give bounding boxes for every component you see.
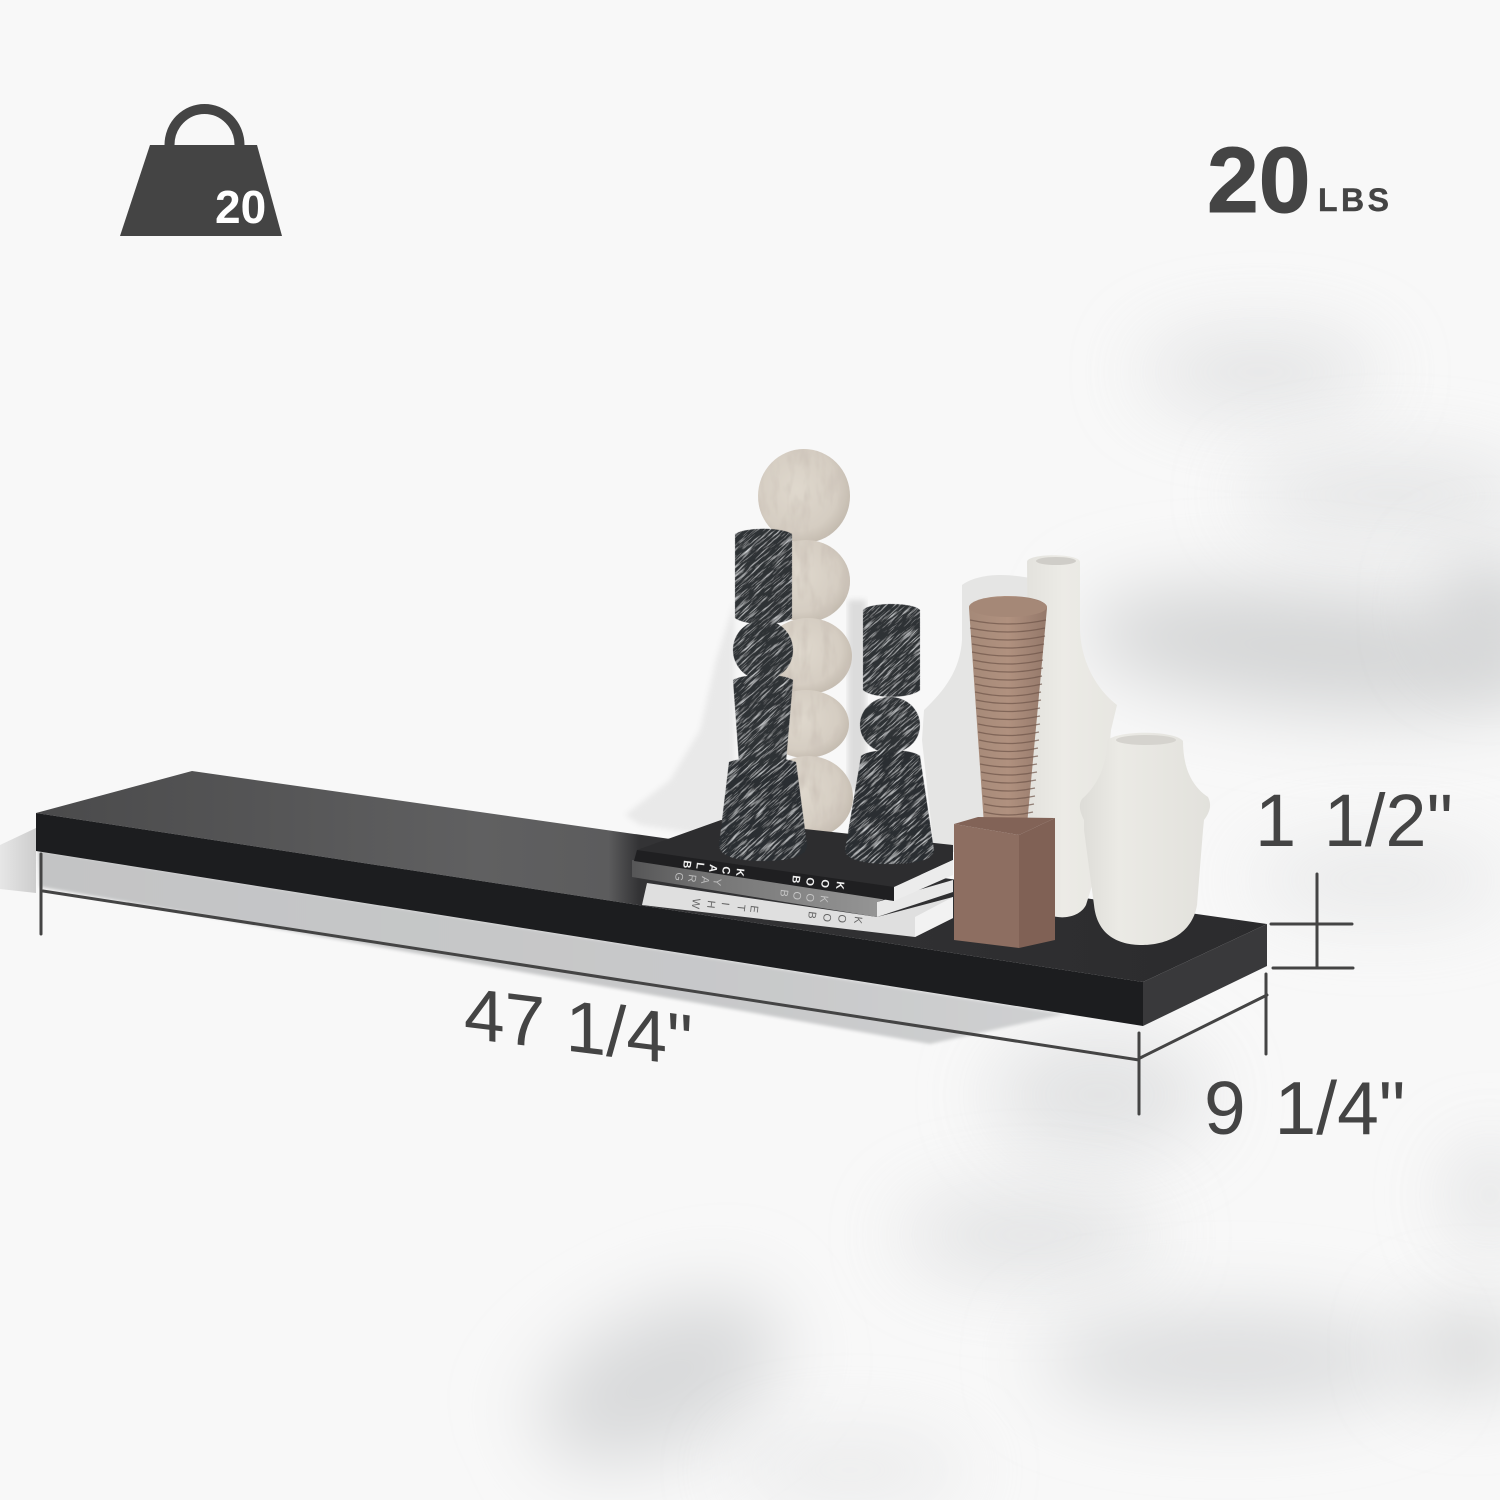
wall shadows cast by objects <box>625 575 1030 860</box>
black book <box>634 820 953 901</box>
depth label: 9 1/4" <box>1204 1066 1405 1150</box>
height label: 1 1/2" <box>1255 779 1453 862</box>
width label: 47 1/4" <box>464 972 693 1082</box>
shadow left of shelf <box>0 828 36 893</box>
white book <box>642 883 953 937</box>
white book: WHITE <box>689 898 760 913</box>
wooden block <box>954 817 1055 948</box>
depth dimension <box>1140 974 1267 1058</box>
short marble candle holder <box>716 560 1063 908</box>
width dimension <box>41 854 1139 1114</box>
striped wooden cone <box>969 596 1047 830</box>
cone stripes <box>970 620 1046 822</box>
weight capacity label <box>1207 128 1392 232</box>
gray book: BOOK <box>777 889 830 904</box>
floating shelf <box>36 771 1267 1026</box>
icon: weight <box>120 109 282 236</box>
small white vase <box>1080 733 1210 945</box>
tall marble candle holder <box>554 485 972 905</box>
stack of books <box>632 820 953 937</box>
shelf front <box>36 813 1143 1026</box>
leaf shadows on wall <box>513 332 1500 1500</box>
weight capacity label: 20 <box>1207 128 1310 232</box>
height dimension <box>1271 874 1353 968</box>
weight capacity label: LBS <box>1318 182 1392 218</box>
gray book <box>632 860 953 917</box>
black book: BOOK <box>789 875 846 890</box>
black book: BLACK <box>680 860 746 877</box>
shadow beneath shelf <box>38 850 1065 1044</box>
gray book: GRAY <box>672 872 723 887</box>
white book: BOOK <box>805 911 864 925</box>
shelf top <box>36 771 1267 982</box>
large white vase <box>1027 555 1117 917</box>
ball totem <box>758 449 853 838</box>
icon weight number: 20 <box>215 181 266 233</box>
shelf side <box>1143 924 1267 1026</box>
